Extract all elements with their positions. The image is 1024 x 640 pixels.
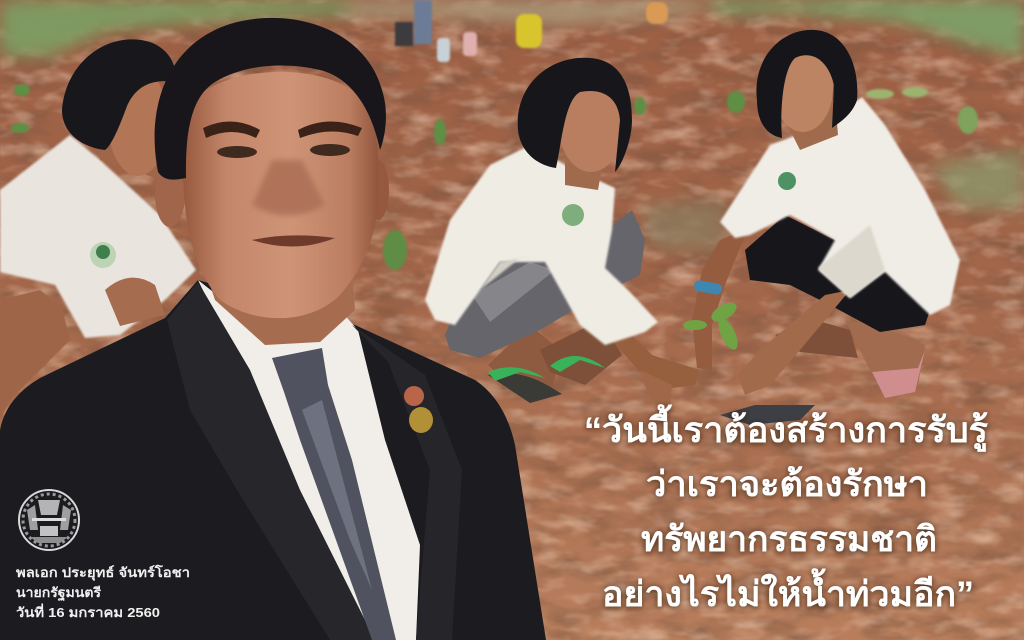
quote: “วันนี้เราต้องสร้างการรับรู้ bbox=[584, 404, 988, 452]
caption: name, title and date bbox=[16, 564, 190, 620]
shirt bbox=[720, 97, 960, 315]
badge bbox=[90, 242, 116, 268]
feet and shins bbox=[775, 320, 858, 358]
face bbox=[183, 72, 379, 318]
quote: อย่างไรไม่ให้น้ำท่วมอีก” bbox=[602, 568, 974, 614]
background vegetation bbox=[0, 0, 1024, 250]
lower legs and feet bbox=[488, 325, 562, 388]
arms bbox=[612, 325, 700, 388]
seedlings bbox=[11, 84, 978, 270]
necktie bbox=[272, 348, 396, 640]
caption: name, title and date: พลเอก ประยุทธ์ จันทร์โอชา bbox=[16, 564, 190, 581]
skin: knee and thigh bbox=[0, 290, 70, 420]
white shirt bbox=[198, 280, 420, 640]
caption: name, title and date: นายกรัฐมนตรี bbox=[16, 585, 101, 602]
girl on the right bbox=[683, 30, 960, 425]
quote: ทรัพยากรธรรมชาติ bbox=[641, 520, 937, 559]
neck bbox=[205, 240, 355, 345]
badge bbox=[778, 172, 796, 190]
shirt bbox=[425, 145, 658, 345]
sapling bbox=[683, 299, 742, 352]
face and neck bbox=[565, 150, 605, 190]
dark plastic on ground bbox=[720, 405, 815, 425]
right lapel bbox=[352, 325, 462, 640]
quote: ว่าเราจะต้องรักษา bbox=[646, 465, 928, 504]
lapel pins bbox=[404, 386, 424, 406]
quote bbox=[584, 404, 988, 614]
black trousers bbox=[745, 215, 935, 332]
arms bbox=[692, 228, 748, 370]
hair bbox=[518, 58, 632, 172]
badge bbox=[562, 204, 584, 226]
face and neck bbox=[785, 100, 838, 150]
shirt bbox=[0, 135, 196, 338]
background workers bbox=[395, 0, 668, 62]
face and neck bbox=[100, 140, 165, 180]
trousers bbox=[445, 210, 645, 358]
hair bbox=[155, 18, 386, 180]
girl on the left bbox=[0, 39, 196, 420]
government seal bbox=[19, 490, 79, 550]
ears bbox=[155, 163, 185, 227]
caption: name, title and date: วันที่ 16 มกราคม 2560 bbox=[16, 603, 160, 620]
left lapel bbox=[167, 282, 375, 640]
prime minister portrait bbox=[0, 18, 546, 640]
hair bbox=[756, 30, 857, 138]
hair bbox=[62, 39, 176, 150]
suit jacket bbox=[0, 280, 546, 640]
eyes and brows bbox=[203, 121, 260, 138]
nose and mouth bbox=[252, 160, 325, 216]
girl in the middle bbox=[425, 58, 700, 407]
